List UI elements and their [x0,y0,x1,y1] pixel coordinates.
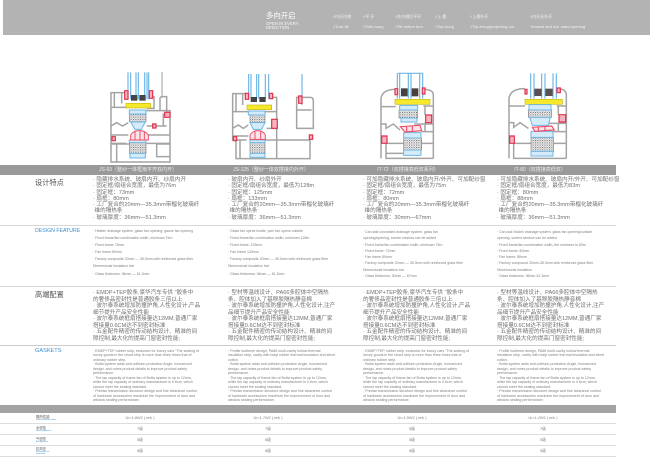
features zh col 4 [497,176,619,221]
gaskets en col 1: performance. [93,371,114,375]
features en col 4: · Fixed frame/fan combination width, the minimum is 83m [497,243,586,247]
gaskets en col 2: insulation strip, cavity with butyl rubber thermal insulation and silent [228,353,335,357]
gaskets en col 1: window sealing performance; [93,398,140,402]
config zh col 1: · EMDP+TEP胶条,豪华汽车专供 "胶条中 [93,290,193,296]
features zh col 3: · 可加隐藏排水系统、玻扇内开/外开、可加配纱窗 [363,177,485,183]
features zh col 2: · 玻扇内开、纱扇外开 [228,177,282,183]
config zh col 4: 品细节提升产品安全性能 [497,310,559,316]
row: wind resistance: Resistance to [36,451,49,453]
features zh col 1: · 玻璃厚度：36mm—51.3mm [93,215,166,221]
config zh col 1: · 波尔泰系统框扇搭接量达12MM,普通厂家 [93,316,197,322]
features en col 4: opening, screen window can be added [497,236,557,240]
features en col 3 [363,230,464,278]
gaskets en col 4: performance. [497,371,518,375]
features zh col 1: · 工厂复合的20mm—35.3mm带榴化玻璃纤 [93,202,199,208]
gaskets en col 3: cannot meet the sealing standard. [363,385,417,389]
diagram: JS-125 [233,74,313,159]
gaskets en col 3: of hardware accessories maximize the improvement of door and [363,394,465,398]
features en col 1 [93,229,194,276]
opening types list: √平 开 [363,14,374,19]
gaskets en col 2: while the lap capacity of ordinary manufacturer is 0.6cm, which [228,380,328,384]
row: wind resistance: 5级 [137,449,143,453]
row: wind resistance [0,446,616,457]
opening types list: √Tilt before turn [395,24,423,28]
gaskets en col 3: · Botta system adds anti-collision protection Angle, humanized [363,362,462,366]
gaskets en col 2: of hardware accessories maximize the improvement of door and [228,394,330,398]
row: wind resistance: 6级 [265,449,271,453]
features en col 2: · Fixed frame/fan combination width, minimum 128m [228,236,309,240]
config zh col 2: · 五金配件精密的传动结构设计、精准的间 [228,329,332,335]
config zh col 4: · 型材等温线设计、PA66多腔体中空隔热 [497,290,598,296]
gaskets en col 2: · Botta system adds anti-collision protection Angle, humanized [228,362,327,366]
opening types list: √上 悬 [435,14,446,19]
gaskets en col 1: · EMDP+TEP rubber strip, exclusive for luxury cars "The sealing of [93,349,199,353]
opening types list: √上悬外开 [470,14,488,19]
row: thermal performance: Heat insulation value [36,419,56,421]
config zh col 3 [363,288,470,342]
features zh col 4: · 扇框：88mm [497,196,533,202]
features zh col 2: · 固定框：125mm [228,190,272,196]
features en col 2: · Glass thickness: 36mm — 51.3mm [228,272,284,276]
gaskets en col 3: design, and notes product details to improve product safety [363,367,457,371]
opening types list: √Turn-tilt [333,24,349,28]
row: wind resistance: 抗风压 [36,447,46,451]
features zh col 4: · 固定框：80mm [497,190,538,196]
features en col 1: · Fixed frame 73mm [93,243,124,247]
features zh col 1: · 固定框/扇组合宽度，最低为76m [93,183,176,189]
config zh col 3: 的奢侈品密封性是普通胶条三倍以上 [363,297,453,303]
header band [3,0,650,35]
features en col 4: Dimensional insulation [497,268,532,272]
gaskets en col 1 [93,349,199,402]
gaskets en col 4: · The lap capacity of frame fan of Botta system is up to 12mm, [497,376,596,380]
features en col 4 [497,230,594,278]
features en col 4: · Glass thickness: 36mm-51.3mm [497,274,549,278]
features zh col 2 [228,176,334,221]
opening types list: √内开业外开 [530,14,552,19]
table header bar: JS-125（整纱一体双搭接内外开） [233,167,309,173]
row: wind resistance: wind load [36,453,45,455]
profile cross-section diagrams [110,72,568,163]
gaskets en col 1: · The lap capacity of frame fan of Botta system is up to 12mm, [93,376,192,380]
gaskets en col 4: · Profile isotherm design, PA66 multi-cavity hollow thermal [497,349,589,353]
table header bar [0,165,616,175]
features en col 4: · Factory compound 20mm-35.3mm with reinforced glass fiber [497,261,593,265]
opening types list [333,14,585,29]
gaskets en col 2: · Precise transmission structure design and fine clearance control [228,389,332,393]
gaskets en col 3: · Precise transmission structure design and fine clearance control [363,389,467,393]
heading: high-end configuration: 高端配置 [35,290,64,299]
features zh col 3: · 扇框：80mm [363,196,399,202]
features en col 3: opening/opening, screen window can be added [363,236,436,240]
row: water tightness: 7级 [265,427,271,431]
config zh col 2: 条、腔体加入了基穆胶隔热静音棉 [228,297,312,303]
config zh col 3: 隙控制,最大化的提高门窗密封性能; [363,336,450,342]
gaskets en col 1: design, and notes product details to improve product safety [93,367,187,371]
features en col 3: · Can add concealed drainage system, glass fan [363,230,438,234]
features zh col 2: 维的隔热条 [230,208,258,214]
config zh col 1: · 波尔泰系统增加防撞护角,人性化设计,产品 [93,303,200,309]
heading: gaskets: GASKETS [35,348,61,354]
gaskets en col 3: ordinary rubber strip. [363,358,396,362]
features en col 1: Dimensional insulation bar [93,264,134,268]
gaskets en col 4: · Precise transmission structure design and fine clearance control [497,389,601,393]
gaskets en col 4: insulation strip, cavity with butyl rubber thermal insulation and silent [497,353,604,357]
row: wind resistance: 5级 [409,449,415,453]
table header bar: JS-93（整纱一体框扇平齐双内开） [99,167,177,173]
features zh col 3: · 固定框/扇组合宽度，最低为75m [363,183,446,189]
gaskets en col 3: performance. [363,371,384,375]
row: water tightness: 5级 [409,427,415,431]
row: water tightness: 7级 [540,427,546,431]
row: wind resistance: 5级 [540,449,546,453]
performance table bar [0,405,616,413]
features en col 3: · Fixed frame: 72mm [363,249,395,253]
opening types list: √Inward and out -ward opening [530,24,585,28]
features zh col 1: 维的隔热条 [95,208,123,214]
opening types list: √先内倒后平开 [395,14,421,19]
config zh col 4: 条、腔体加入了基穆胶隔热静音棉 [497,297,581,303]
gaskets en col 2: window sealing performance; [228,398,275,402]
row: air tightness: 气密性 [36,436,46,440]
gaskets en col 2: performance. [228,371,249,375]
gaskets en col 4: · Botta system adds anti-collision protection Angle, humanized [497,362,596,366]
config zh col 1: 的奢侈品密封性是普通胶条三倍以上 [93,297,183,303]
row: air tightness: 5级 [137,438,143,442]
config zh col 2 [228,289,335,342]
config zh col 1: 隙控制,最大化的提高门窗密封性能; [93,336,180,342]
row: thermal performance: 隔热性能 [36,414,50,418]
features zh col 3: 维的隔热条 [365,208,393,214]
config zh col 3: · 波尔泰系统增加防撞护角,人性化设计,产品 [363,303,470,309]
features zh col 4: · 玻璃厚度：36mm—51.3mm [497,215,570,221]
features zh col 1 [93,176,200,221]
opening types list: √Top-hung/projecting out [470,24,514,28]
features en col 2: · Glass fan opens inside, yarn fan opens outside [228,229,303,233]
features en col 2: · Fixed frame: 125mm [228,243,262,247]
config zh col 2: 品细节提升产品安全性能 [228,310,290,316]
gaskets en col 4: cannot meet the sealing standard. [497,385,551,389]
row: thermal performance: Ur=1.5W2 ( m/k ) [397,416,426,420]
row: air tightness: 5级 [540,438,546,442]
features en col 3: · Fixed frame/fan combination width, minimum 75m [363,243,442,247]
diagram: IT-80 [509,73,566,158]
gaskets en col 1: while the lap capacity of ordinary manufacturer is 0.6cm, which [93,380,193,384]
opening types list: √Side-hung [363,24,383,28]
features en col 1: · Fixed frame/fan combination width, minimum 76m [93,236,172,240]
gaskets en col 3: · EMDP+TEP rubber strip, exclusive for luxury cars "The sealing of [363,349,469,353]
gaskets en col 1: cannot meet the sealing standard. [93,385,147,389]
config zh col 3: · 五金配件精密的传动结构设计、精准的间 [363,329,467,335]
gaskets en col 4: of hardware accessories maximize the improvement of door and [497,394,599,398]
features en col 2 [228,229,328,276]
header title: 多向开启 [266,11,296,20]
features zh col 4: · 工厂复合的20mm—35.3mm带榴化玻璃纤 [497,202,603,208]
gaskets en col 1: · Precise transmission structure design and fine clearance control [93,389,197,393]
features en col 2: · Factory composite 20mm — 35.3mm with reinforced glass fiber [228,257,328,261]
features zh col 3: · 固定框：72mm [363,190,404,196]
config zh col 1: · 五金配件精密的传动结构设计、精准的间 [93,329,197,335]
features en col 4: · Can add hidden drainage system, glass fan opening/outside [497,230,592,234]
table header bar: IT-72（双搭接高低双系列） [377,167,439,173]
row: thermal performance: Ur=1.2W2 ( m/k ) [528,416,558,420]
config zh col 2: 搭接量0.6CM达不到密封标准 [228,323,300,329]
gaskets en col 4 [497,349,604,402]
features en col 3: Dimensional insulation bar [363,268,404,272]
gaskets en col 3: while the lap capacity of ordinary manufacturer is 0.6cm, which [363,380,463,384]
config zh col 3: · EMDP+TEP胶条,豪华汽车专供 "胶条中 [363,290,463,296]
row: water tightness: Water tightness [36,430,51,432]
gaskets en col 1: · Botta system adds anti-collision protection Angle, humanized [93,362,192,366]
header title [266,11,299,30]
features zh col 2: · 玻璃厚度：36mm—51.3mm [228,215,301,221]
gaskets en col 2 [228,349,336,402]
gaskets en col 3: luxury goods in the chord strip is more than three times that of [363,353,461,357]
features en col 2: · Fan frame 133mm [228,250,259,254]
row: thermal performance: Ur=1.7W2 ( m/k ) [253,416,282,420]
row: thermal performance [0,413,616,424]
config zh col 3: · 波尔泰系统框扇搭接量达12MM,普通厂家 [363,316,467,322]
features en col 1: · Hidden drainage system, glass fan opening, gauze fan opening [93,229,193,233]
config zh col 4: · 波尔泰系统框扇搭接量达12MM,普通厂家 [497,316,601,322]
features en col 3: · Glass thickness: 30mm — 67mm [363,274,416,278]
features zh col 2: · 扇框：133mm [228,196,267,202]
diagram: IT-72 [381,73,433,158]
diagram: JS-93 [111,72,170,162]
features en col 3: · Fan frame 80mm [363,255,392,259]
config zh col 1: 搭接量0.6CM达不到密封标准 [93,323,165,329]
table header bar: IT-80（双搭接高低双） [514,167,566,173]
row: water tightness: 水密性 [36,426,46,430]
features zh col 4: 维的隔热条 [499,208,527,214]
heading: design features zh: 设计特点 [35,178,64,187]
row: water tightness: 7级 [137,427,143,431]
features zh col 2: · 固定框/扇组合宽度，最低为128m [228,183,314,189]
gaskets en col 2: cannot meet the sealing standard. [228,385,282,389]
row: thermal performance: Ur=1.8W2 ( m/k ) [125,416,154,420]
row: air tightness: 6级 [265,438,271,442]
gaskets en col 3 [363,349,469,402]
config zh col 2: · 波尔泰系统框扇搭接量达12MM,普通厂家 [228,316,332,322]
config zh col 3: 搭接量0.6CM达不到密封标准 [363,323,435,329]
features zh col 1: · 扇框：80mm [93,196,129,202]
gaskets en col 4: while the lap capacity of ordinary manufacturer is 0.6cm, which [497,380,597,384]
features zh col 4: · 固定框/扇组合宽度，最低为83m [497,183,580,189]
gaskets en col 2: design, and notes product details to improve product safety [228,367,322,371]
gaskets en col 4: cotton. [497,358,508,362]
gaskets en col 1: ordinary rubber strip. [93,358,126,362]
config zh col 1 [93,288,200,342]
gaskets en col 1: luxury goods in the chord strip is more than three times that of [93,353,191,357]
gaskets en col 3: · The lap capacity of frame fan of Botta system is up to 12mm, [363,376,462,380]
header title: DIRECTION [266,25,289,30]
features zh col 2: · 工厂复合的20mm—35.3mm带榴化玻璃纤 [228,202,334,208]
config zh col 4: 隙控制,最大化的提高门窗密封性能; [497,336,584,342]
config zh col 2: 隙控制,最大化的提高门窗密封性能; [228,336,315,342]
row: air tightness: 5级 [409,438,415,442]
gaskets en col 2: · Profile isotherm design, PA66 multi-cavity hollow thermal [228,349,320,353]
features zh col 3: · 玻璃厚度：30mm—67mm [363,215,431,221]
features en col 4: · Fixed frame: 80mm [497,249,529,253]
config zh col 4: 搭接量0.6CM达不到密封标准 [497,323,569,329]
features en col 1: · Glass thickness: 36mm — 51.3mm [93,272,149,276]
config zh col 1: 细节提升产品安全性能 [93,310,149,316]
row: air tightness [0,435,616,446]
features zh col 3: · 工厂复合的20mm—35.3mm带榴化玻璃纤 [363,202,469,208]
gaskets en col 4: design, and notes product details to improve product safety [497,367,591,371]
row: air tightness: Air tightness [36,441,48,443]
config zh col 3: 细节提升产品安全性能 [363,310,419,316]
features zh col 1: · 固定框：73mm [93,190,134,196]
features zh col 1: · 隐藏排水系统、玻扇内开、纱扇内开 [93,177,186,183]
features zh col 3 [363,176,485,221]
config zh col 4: · 五金配件精密的传动结构设计、精准的间 [497,329,601,335]
features en col 3: · Factory composite 20mm — 35.3mm with reinforced glass fiber [363,261,463,265]
config zh col 2: · 型材等温线设计、PA66多腔体中空隔热 [228,290,329,296]
features en col 1: · Fan frame 80mm [93,250,122,254]
gaskets en col 2: · The lap capacity of frame fan of Botta system is up to 12mm, [228,376,327,380]
gaskets en col 1: of hardware accessories maximize the improvement of door and [93,394,195,398]
gaskets en col 4: window sealing performance; [497,398,544,402]
config zh col 2: · 波尔泰系统增加防撞护角,人性化设计,注产 [228,303,335,309]
heading: design feature en: DESIGN FEATURE [35,228,80,234]
gaskets en col 2: cotton. [228,358,239,362]
features zh col 4: · 可加隐藏排水系统、玻扇内开/外开、可加配纱窗 [497,177,619,183]
features en col 1: · Factory composite 20mm — 35.3mm with reinforced glass fiber [93,257,193,261]
opening types list: √内开内倒 [333,14,351,19]
features en col 4: · Fan frame: 88mm [497,255,527,259]
features en col 2: Dimensional insulation bar [228,264,269,268]
opening types list: √Top-hung [435,24,454,28]
row: water tightness [0,424,616,435]
gaskets en col 3: window sealing performance; [363,398,410,402]
config zh col 4: · 波尔泰系统增加防撞护角,人性化设计,注产 [497,303,604,309]
header title: OPEN IN EVERY [266,21,299,26]
config zh col 4 [497,289,604,342]
